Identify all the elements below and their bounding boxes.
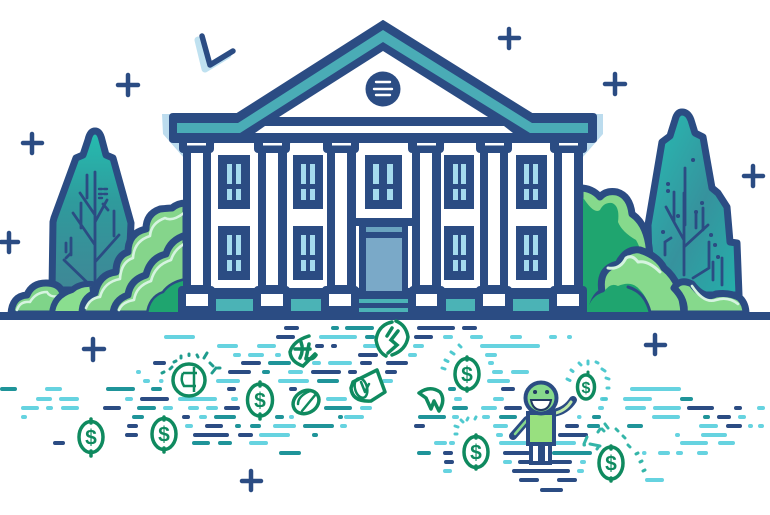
ground line [0,312,770,320]
roof and cornice [170,21,596,142]
coin rays [162,353,220,373]
legs [531,443,540,463]
leaf coin [289,386,323,418]
person waving [513,382,573,463]
window panes [227,164,538,271]
frieze strip [255,126,513,133]
dollar coin [248,382,272,419]
leaf banknote [351,370,385,401]
cyan dashes [23,337,763,480]
tree branches [64,172,119,290]
dollar coin: $ [85,426,97,450]
column capitals and bases [178,138,587,316]
right tree [648,112,739,295]
right bushes [580,188,746,314]
eyes [535,390,547,394]
wall [183,140,583,312]
torn coin [376,321,408,356]
teal dashes [2,328,708,453]
pediment emblem [366,72,400,106]
dollar coin: $ [461,364,473,386]
bush: far right [674,282,746,314]
bush: large back [82,203,186,314]
roof teal band [177,30,588,133]
navy dashes [55,328,740,490]
sparkle arcs [442,345,609,434]
dollar coin: $ [470,442,482,464]
dollar coin [152,417,176,452]
dollar coin: $ [158,424,170,446]
cornice shadow [162,114,603,158]
windows [218,155,547,280]
spinning coin held up: $ [582,380,591,397]
dollar coin [599,446,623,481]
arms [513,420,527,436]
door [366,227,402,291]
head [526,382,556,414]
bush: small middle [52,284,96,314]
dollar coin: $ [254,390,266,412]
left bushes [11,203,186,314]
icon: check mark [198,36,233,69]
bank building [162,21,603,316]
column shafts [186,143,579,306]
bush: front dark part [587,284,650,312]
base plinth panels [216,299,549,312]
bush: front [591,250,684,314]
tree branches [663,160,722,285]
dollar coin [455,357,479,391]
dollar coin [464,435,488,469]
smile [531,400,551,410]
broken coin [419,389,443,411]
dollar coin: $ [605,452,617,476]
bush: large front [113,235,186,314]
torn coin [290,336,316,366]
coin with rays [162,353,220,396]
dollar coin [79,419,103,456]
bush: small far left [11,283,80,314]
teal sparkle dashes [584,424,645,471]
wall bays [211,143,554,291]
spinning coin held up [578,372,594,399]
bush: dark back [580,188,650,314]
left tree [52,131,131,290]
bush: dark green [147,279,186,314]
body [528,413,554,444]
pediment [279,51,488,117]
